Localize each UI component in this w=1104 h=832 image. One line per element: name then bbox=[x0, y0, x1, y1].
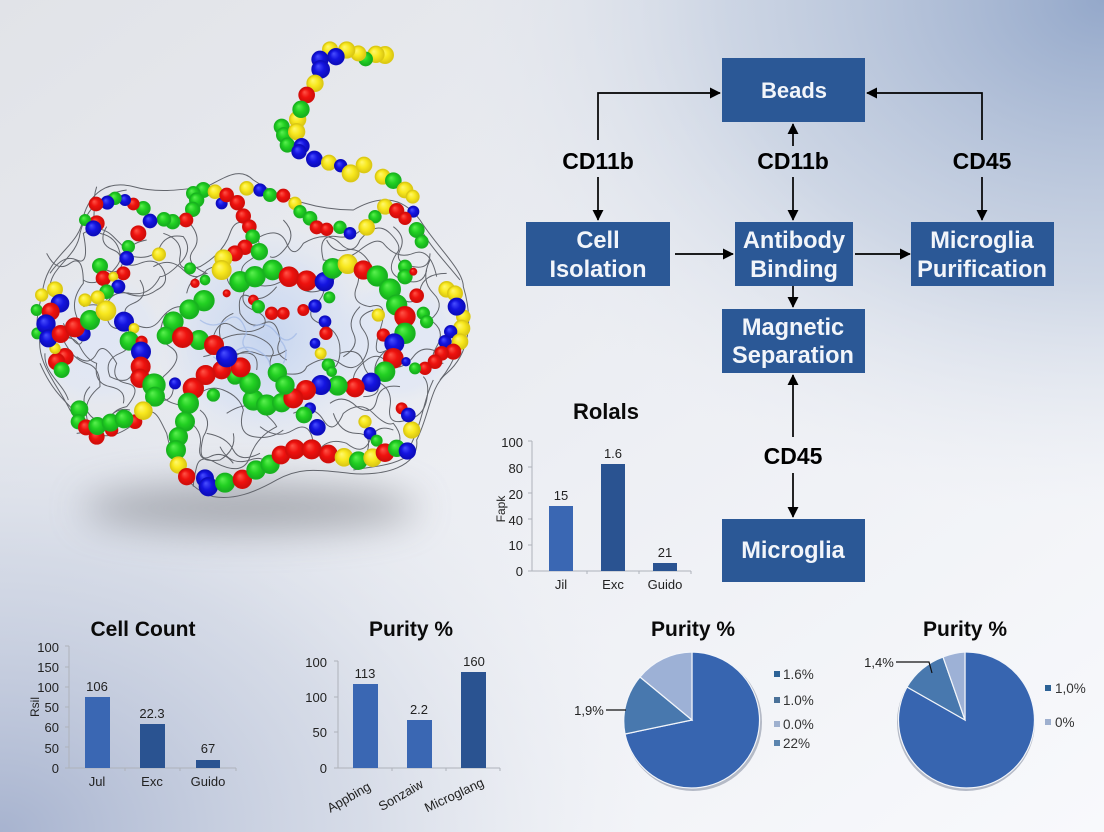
pie chart: Purity % right: 1,0% bbox=[1055, 681, 1086, 696]
box: Microglia Purification: Microglia bbox=[930, 228, 1035, 254]
bar chart: Rolals: 100 bbox=[501, 435, 523, 450]
box: Beads bbox=[722, 58, 865, 122]
bead chain: right cluster bbox=[402, 282, 470, 374]
bead chain: lower loop bbox=[167, 393, 420, 496]
box: Beads: Beads bbox=[761, 78, 827, 103]
bar chart: Rolals: 40 bbox=[509, 513, 523, 528]
arrow: CD45 to Beads bbox=[867, 93, 982, 140]
label: CD45 lower: CD45 bbox=[764, 443, 823, 469]
bar chart: Cell Count: 0 bbox=[52, 761, 59, 776]
bar chart: Purity %: 50 bbox=[313, 725, 327, 740]
bar chart: Rolals: Jil bbox=[555, 577, 567, 592]
bar chart: Cell Count: Exc bbox=[141, 774, 163, 789]
pie chart: Purity % left: 1.0% bbox=[783, 693, 814, 708]
box: Microglia bbox=[722, 519, 865, 582]
pie chart: Purity % right: 1,4% bbox=[864, 655, 894, 670]
pie chart: Purity % right: 0% bbox=[1055, 715, 1075, 730]
molecule illustration: beaded chain in wire mesh bbox=[31, 42, 470, 532]
box: Antibody Binding: Binding bbox=[750, 257, 838, 283]
glass spheres bbox=[35, 227, 460, 447]
box: Microglia Purification bbox=[911, 222, 1054, 286]
bar chart: Cell Count: Jul bbox=[89, 774, 105, 789]
bar chart: Rolals: 0 bbox=[516, 564, 523, 579]
bar chart: Rolals: 10 bbox=[509, 538, 523, 553]
central blue detail bbox=[200, 317, 297, 373]
arrow: Antibody Binding to Magnetic Separation bbox=[792, 286, 794, 307]
bar chart: Cell Count: 106 bbox=[86, 679, 108, 694]
bar chart: Rolals: 80 bbox=[509, 461, 523, 476]
arrow: CD45 to Microglia bbox=[792, 473, 794, 517]
bar chart: Cell Count: Guido bbox=[191, 774, 225, 789]
bar chart: Cell Count: 22.3 bbox=[139, 706, 165, 721]
bar chart: Cell Count: 100 bbox=[37, 680, 59, 695]
pie chart: Purity % right: Purity % bbox=[923, 618, 1007, 641]
label: CD11b left: CD11b bbox=[562, 148, 634, 174]
bar chart: Purity %: Appbing bbox=[324, 779, 373, 816]
bar chart: Purity %: 113 bbox=[355, 666, 375, 681]
pie chart: Purity % right bbox=[864, 618, 1086, 791]
pie chart: Purity % left bbox=[574, 618, 814, 791]
bar chart: Rolals: Fapk bbox=[494, 495, 508, 522]
bead chain: top arc bbox=[80, 182, 356, 279]
arrow: Cell Isolation to Antibody Binding bbox=[675, 253, 733, 255]
box: Magnetic Separation: Separation bbox=[732, 343, 854, 369]
label: CD45 right: CD45 bbox=[953, 148, 1012, 174]
arrow: CD45 to Microglia Purification bbox=[981, 177, 983, 220]
bar chart: Purity %: 2.2 bbox=[410, 702, 428, 717]
bead chain: central loop bbox=[157, 255, 433, 415]
arrow: CD11b to Beads bbox=[598, 93, 720, 140]
arrow: Antibody Binding to Microglia Purification bbox=[855, 253, 910, 255]
box: Magnetic Separation bbox=[722, 309, 865, 373]
bar chart: Cell Count: Rsil bbox=[28, 697, 42, 717]
bar chart: Rolals: Rolals bbox=[573, 399, 639, 424]
bar chart: Cell Count: Cell Count bbox=[90, 618, 196, 641]
pie chart: Purity % left: 0.0% bbox=[783, 717, 814, 732]
arrow: CD45 to Magnetic Separation bbox=[792, 375, 794, 437]
bar chart: Cell Count: 150 bbox=[37, 660, 59, 675]
floor shadow bbox=[82, 484, 418, 532]
box: Antibody Binding bbox=[735, 222, 853, 286]
flowchart bbox=[526, 58, 1054, 582]
bar chart: Purity %: Sonzaiw bbox=[376, 776, 426, 814]
arrow: CD11b to Cell Isolation bbox=[597, 177, 599, 220]
bar chart: Purity %: Purity % bbox=[369, 618, 453, 641]
wire mesh bbox=[37, 174, 469, 498]
bead chain: left cluster bbox=[31, 282, 165, 444]
bar chart: Cell Count bbox=[28, 618, 236, 789]
bar chart: Purity %: 160 bbox=[463, 654, 485, 669]
bar chart: Rolals: Guido bbox=[648, 577, 682, 592]
bar chart: Purity %: 100 bbox=[305, 690, 327, 705]
bar chart: Rolals: 21 bbox=[658, 545, 672, 560]
label: CD11b centre: CD11b bbox=[757, 148, 829, 174]
bar chart: Rolals bbox=[494, 399, 691, 592]
bar chart: Rolals: 20 bbox=[509, 487, 523, 502]
pie chart: Purity % left: Purity % bbox=[651, 618, 735, 641]
box: Antibody Binding: Antibody bbox=[743, 228, 845, 254]
arrow: CD11b up to Beads bbox=[792, 124, 794, 146]
box: Cell Isolation: Isolation bbox=[549, 257, 647, 283]
bead chain: upper left strand bbox=[93, 226, 230, 298]
bar chart: Cell Count: 100 bbox=[37, 640, 59, 655]
pie chart: Purity % left: 1,9% bbox=[574, 703, 604, 718]
bar chart: Rolals: 15 bbox=[554, 488, 568, 503]
bead chain: floating tail bbox=[274, 42, 428, 248]
box: Cell Isolation: Cell bbox=[576, 228, 620, 254]
bar chart: Cell Count: 50 bbox=[45, 741, 59, 756]
bar chart: Purity %: 0 bbox=[320, 761, 327, 776]
bar chart: Purity %: Microglang bbox=[422, 775, 486, 815]
bar chart: Cell Count: 60 bbox=[45, 720, 59, 735]
bar chart: Purity %: 100 bbox=[305, 655, 327, 670]
box: Magnetic Separation: Magnetic bbox=[742, 315, 844, 341]
pie chart: Purity % left: 22% bbox=[783, 736, 810, 751]
bar chart: Rolals: 1.6 bbox=[604, 446, 622, 461]
box: Microglia Purification: Purification bbox=[917, 257, 1047, 283]
box: Microglia: Microglia bbox=[741, 538, 846, 564]
arrow: CD11b to Antibody Binding bbox=[792, 177, 794, 220]
pie chart: Purity % left: 1.6% bbox=[783, 667, 814, 682]
bar chart: Rolals: Exc bbox=[602, 577, 624, 592]
bar chart: Cell Count: 67 bbox=[201, 741, 215, 756]
bar chart: Purity % bbox=[305, 618, 500, 816]
box: Cell Isolation bbox=[526, 222, 670, 286]
bar chart: Cell Count: 50 bbox=[45, 700, 59, 715]
